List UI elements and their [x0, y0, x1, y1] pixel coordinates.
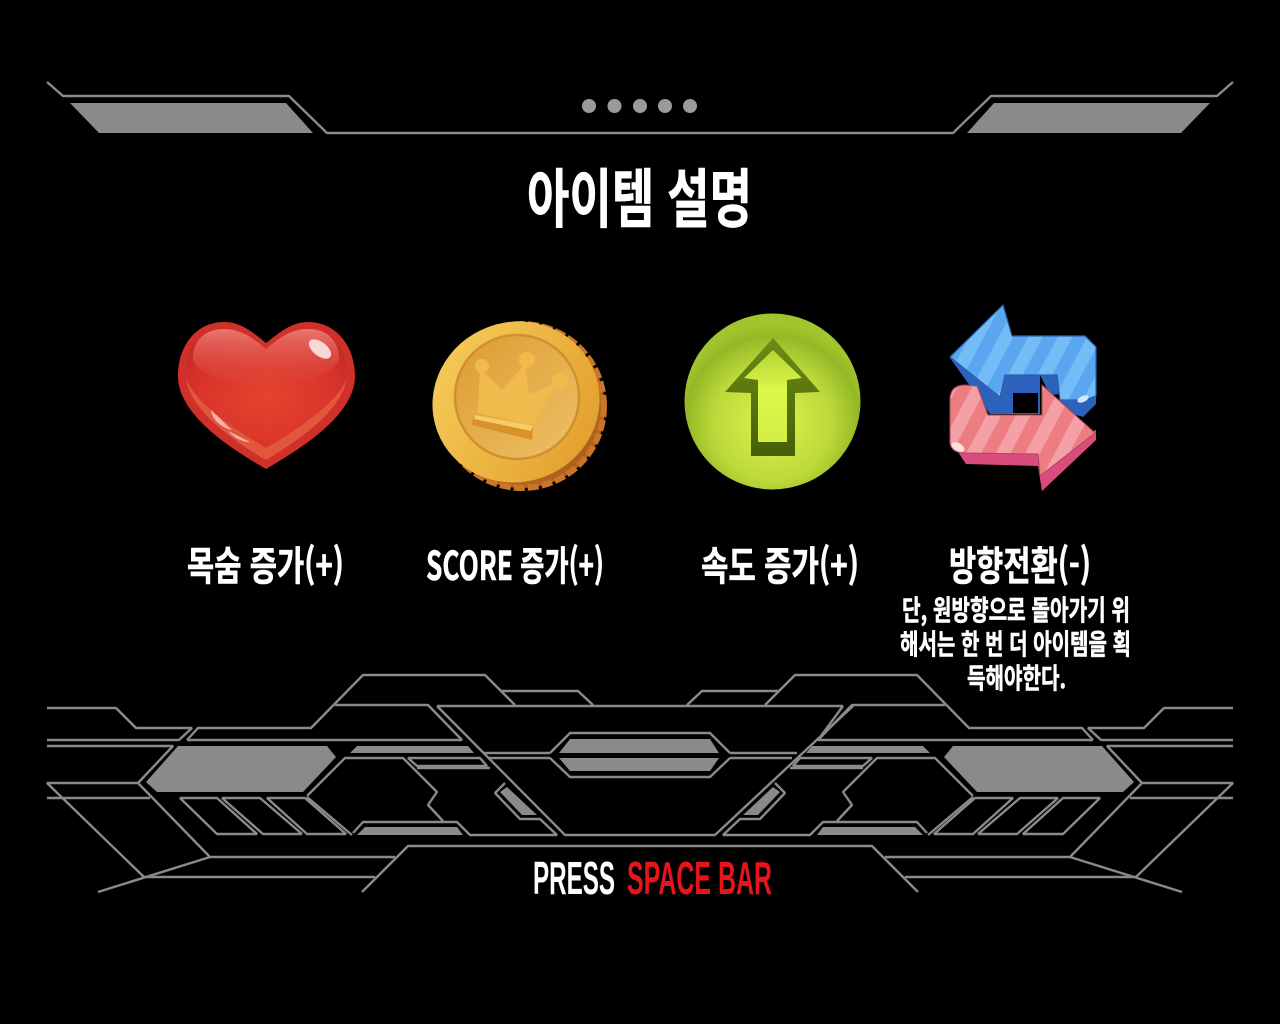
- label: score up: SCORE 증가(+): [426, 534, 604, 592]
- icon: gold coin with crown: [410, 298, 622, 506]
- press space bar prompt: PRESS: [533, 852, 615, 904]
- bottom circuit frame: [47, 675, 1233, 892]
- direction change description: 득해야한다.: [967, 657, 1066, 697]
- label: direction change: 방향전환(-): [949, 534, 1091, 592]
- blue arrow: [950, 305, 1096, 417]
- label: life up: 목숨 증가(+): [187, 534, 344, 592]
- label: speed up: 속도 증가(+): [701, 534, 859, 592]
- progress dots: [582, 99, 697, 113]
- direction change description: 해서는 한 번 더 아이템을 획: [900, 623, 1131, 663]
- left circuit: [47, 675, 593, 892]
- title: 아이템 설명: [527, 149, 752, 241]
- direction change description: 단, 원방향으로 돌아가기 위: [902, 589, 1130, 629]
- top frame: [47, 82, 1233, 133]
- pink arrow: [950, 385, 1096, 491]
- right circuit: [687, 675, 1233, 892]
- icon: speed up arrow: [684, 314, 860, 490]
- crown: [472, 352, 568, 440]
- icon: heart: [178, 322, 355, 469]
- direction change description: [900, 589, 1131, 697]
- center circuit: [362, 706, 918, 892]
- press space bar prompt: [533, 852, 772, 904]
- icon: direction swap arrows: [950, 305, 1096, 491]
- press space bar prompt: SPACE BAR: [627, 852, 772, 904]
